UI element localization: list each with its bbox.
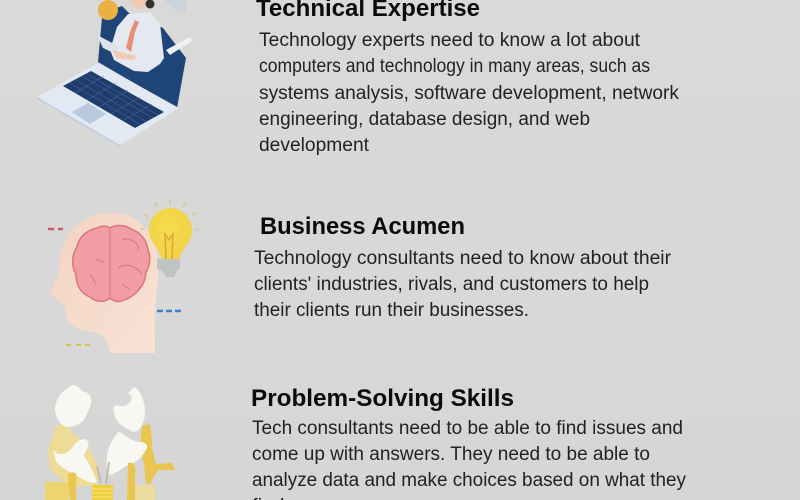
laptop base xyxy=(37,63,179,145)
body text: systems analysis, software development, network xyxy=(259,83,679,104)
right pedestal xyxy=(127,485,155,500)
puzzle top right xyxy=(113,387,145,432)
head silhouette xyxy=(50,213,158,353)
left pedestal xyxy=(45,482,69,500)
body text xyxy=(259,30,679,156)
puzzle bottom right xyxy=(106,432,147,475)
trackpad xyxy=(72,103,106,124)
body text: computers and technology in many areas, such as xyxy=(259,56,650,77)
heading: Business Acumen xyxy=(260,213,465,240)
body text: Technology experts need to know a lot about xyxy=(259,30,641,51)
bulb filament xyxy=(165,234,173,259)
icon: head with brain and light bulb xyxy=(48,199,199,353)
blue dashes xyxy=(157,310,181,312)
body text: Technology consultants need to know about their xyxy=(254,248,672,269)
brain folds xyxy=(90,239,142,290)
icon: people assembling puzzle pieces xyxy=(45,385,175,500)
body text: engineering, database design, and web xyxy=(259,109,590,130)
bulb base xyxy=(157,259,180,277)
brain xyxy=(73,225,150,301)
cloud badge xyxy=(164,0,187,13)
body text: come up with answers. They need to be able to xyxy=(252,444,650,465)
heading: Problem-Solving Skills xyxy=(251,385,514,412)
body text: analyze data and make choices based on what they xyxy=(252,470,686,491)
right figure xyxy=(140,424,175,484)
laptop front edge xyxy=(37,97,120,147)
red dashes xyxy=(48,228,63,230)
body text: Tech consultants need to be able to find issues and xyxy=(252,418,683,439)
light bulb glass xyxy=(149,208,192,259)
left figure xyxy=(48,424,100,486)
yellow dashes xyxy=(66,344,90,346)
puzzle bottom left xyxy=(53,439,97,483)
brain centre fold xyxy=(109,228,111,298)
consultant figure xyxy=(97,0,164,72)
puzzle top left xyxy=(55,385,91,427)
bulb rays xyxy=(141,199,199,230)
body text: their clients run their businesses. xyxy=(254,300,529,321)
section: problem-solving skills xyxy=(251,385,686,500)
gold coins xyxy=(98,0,118,20)
body text: clients' industries, rivals, and customers to help xyxy=(254,274,649,295)
body text xyxy=(254,248,672,321)
central stems xyxy=(97,462,109,484)
seated figures xyxy=(68,463,136,500)
section: technical expertise xyxy=(256,0,679,156)
keyboard key grid xyxy=(70,74,158,125)
central yellow stack xyxy=(92,485,113,500)
section: business acumen xyxy=(254,213,672,321)
keyboard xyxy=(63,71,164,128)
small airplane xyxy=(166,37,192,55)
icon: consultant emerging from laptop xyxy=(37,0,192,147)
body text xyxy=(252,418,686,500)
body text: development xyxy=(259,135,370,156)
laptop screen xyxy=(98,6,186,108)
